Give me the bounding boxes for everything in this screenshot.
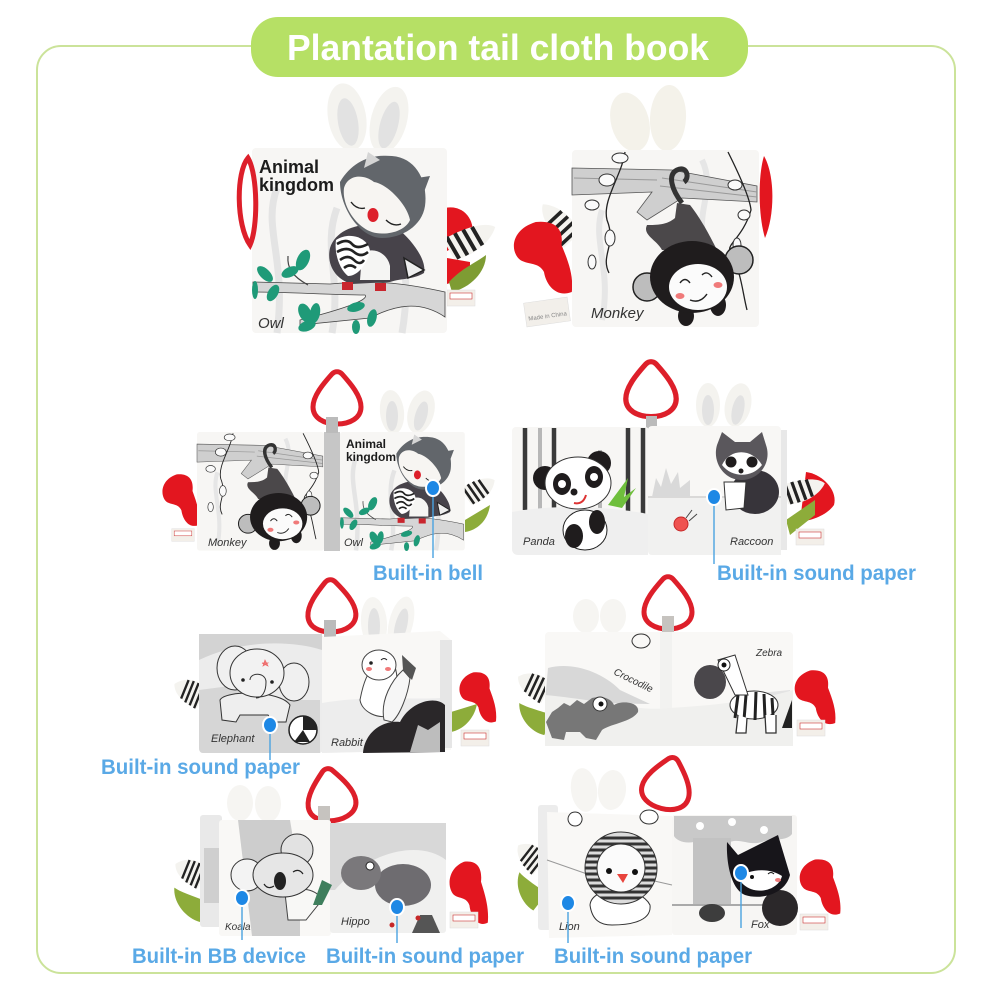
name: raccoon: Raccoon — [730, 536, 773, 548]
cover title: Animal — [259, 157, 319, 177]
name: crocodile: Crocodile — [612, 667, 655, 695]
callout: built-in bell: Built-in bell — [373, 562, 483, 585]
callout: sound paper elephant — [101, 717, 300, 779]
spread text: kingdom: kingdom — [346, 450, 396, 464]
book: monkey back cover — [514, 84, 772, 327]
cover title line two: kingdom — [259, 175, 334, 195]
book: monkey back cover: Made in China — [528, 311, 568, 323]
book: crocodile and zebra spread — [512, 577, 835, 746]
callout: sound paper raccoon — [707, 489, 916, 585]
callout: BB device — [132, 890, 306, 968]
name: lion: Lion — [559, 921, 580, 933]
book: owl cover — [239, 80, 501, 334]
callout: BB device: Built-in BB device — [132, 945, 306, 968]
title pill: Plantation tail cloth book — [287, 27, 710, 68]
name: zebra: Zebra — [755, 648, 783, 659]
name: owl: Owl — [344, 537, 364, 549]
name: rabbit: Rabbit — [331, 737, 364, 749]
book: lion and fox spread — [506, 752, 840, 938]
callout: sound paper elephant: Built-in sound paper — [101, 756, 300, 779]
book: koala and hippo spread — [166, 765, 488, 936]
callout: built-in bell — [373, 480, 483, 585]
monkey name: Monkey — [591, 305, 645, 322]
callout: sound paper hippo: Built-in sound paper — [326, 945, 524, 968]
callout: sound paper lion and fox — [554, 865, 752, 968]
name: hippo: Hippo — [341, 916, 370, 928]
name: monkey: Monkey — [208, 537, 248, 549]
name: panda: Panda — [523, 536, 555, 548]
spread text: Animal: Animal — [346, 437, 386, 451]
name: elephant: Elephant — [211, 733, 255, 745]
callout: sound paper lion and fox: Built-in sound paper — [554, 945, 752, 968]
name: fox: Fox — [751, 919, 770, 931]
book: monkey and owl spread — [162, 372, 500, 551]
name: koala: Koala — [225, 922, 251, 933]
book: panda and raccoon spread — [512, 362, 835, 555]
title pill — [251, 17, 748, 77]
callout: sound paper raccoon: Built-in sound paper — [717, 562, 916, 585]
owl name: Owl — [258, 315, 284, 332]
callout: sound paper hippo — [326, 899, 524, 968]
book: elephant and rabbit spread — [169, 578, 496, 753]
